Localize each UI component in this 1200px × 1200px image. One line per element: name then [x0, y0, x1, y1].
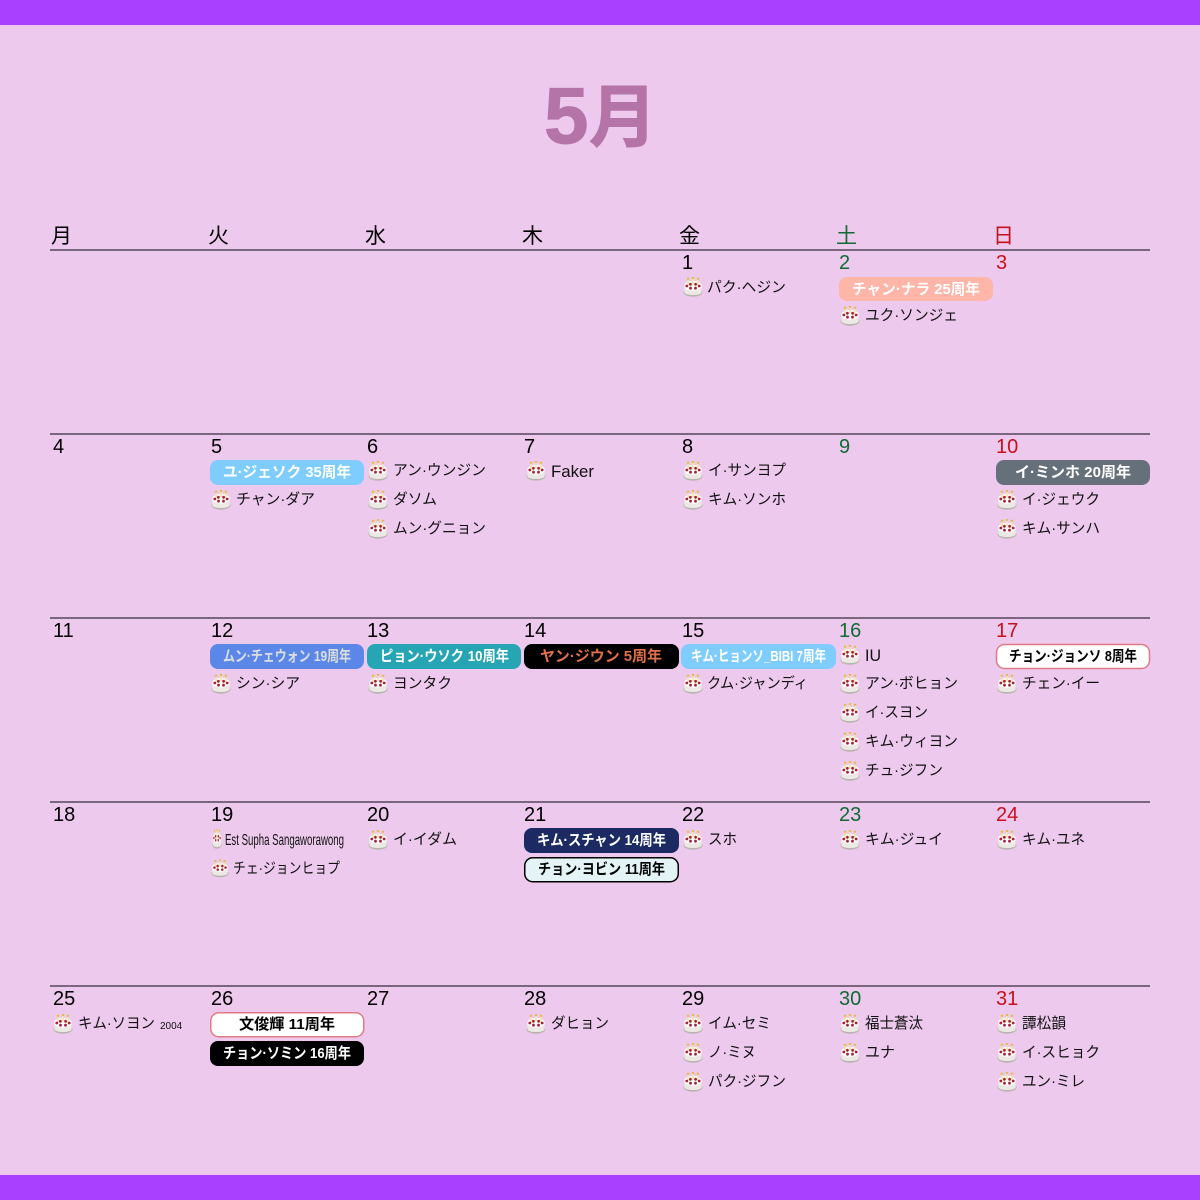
weekday header: 木 [522, 225, 543, 248]
week 3: 11 [53, 620, 74, 642]
birthday: チャン·ダア: チャン·ダア [236, 491, 315, 508]
bottom band [0, 1175, 1200, 1200]
birthday: 譚松韻 [998, 1014, 1066, 1034]
week 4: 20 [367, 804, 389, 826]
birthday: パク·ジフン: パク·ジフン [708, 1073, 786, 1090]
birthday: アン·ウンジン [368, 461, 486, 481]
weekday header [51, 225, 1014, 248]
week 4: 19 [211, 804, 233, 826]
birthday: イ·イダム [368, 830, 457, 850]
week 2 [53, 436, 1150, 539]
birthday: 譚松韻: 譚松韻 [1022, 1015, 1066, 1032]
birthday: キム·ユネ [998, 830, 1085, 850]
anniversary pill: キム·ヒョンソ_BIBI [681, 644, 836, 669]
week 2: 6 [367, 436, 378, 458]
birthday: ダヒョン [526, 1014, 609, 1034]
anniversary pill: チョン·ソミン: チョン·ソミン 16周年 [223, 1044, 351, 1062]
birthday: イ·イダム: イ·イダム [393, 831, 457, 848]
anniversary pill: チョン·ジョンソ [996, 644, 1150, 668]
week 5: 31 [996, 988, 1018, 1010]
week 2: 4 [53, 436, 64, 458]
week 3: 15 [682, 620, 704, 642]
birthday: ムン·グニョン: ムン·グニョン [393, 520, 486, 537]
anniversary pill: イ·ミンホ: イ·ミンホ 20周年 [1015, 463, 1131, 481]
anniversary pill: チャン·ナラ: チャン·ナラ 25周年 [852, 280, 980, 298]
top band [0, 0, 1200, 25]
week 4: 24 [996, 804, 1018, 826]
birthday: ダソム [368, 490, 437, 510]
week 1 [682, 252, 1007, 326]
anniversary pill: チャン·ナラ [839, 277, 993, 301]
birthday: キム·ユネ: キム·ユネ [1022, 831, 1085, 848]
weekday header: 水 [365, 225, 386, 248]
birthday: キム·ソヨン 2004: キム·ソヨン [78, 1015, 155, 1032]
week 3 [53, 620, 1150, 781]
birthday: イ·ジェウク [998, 490, 1100, 510]
birthday: キム·ソンホ: キム·ソンホ [708, 491, 786, 508]
anniversary pill: イ·ミンホ [996, 460, 1150, 485]
birthday: キム·ジュイ [840, 830, 943, 850]
birthday: クム·ジャンディ [684, 674, 808, 694]
birthday: アン·ボヒョン: アン·ボヒョン [865, 675, 958, 692]
week 4: 23 [839, 804, 861, 826]
anniversary pill: チョン·ソミン [210, 1041, 364, 1066]
birthday: クム·ジャンディ: クム·ジャンディ [707, 674, 808, 692]
week 4: 21 [524, 804, 546, 826]
birthday: ユナ [840, 1043, 895, 1063]
birthday: イ·スヨン [840, 703, 928, 723]
birthday: キム·ジュイ: キム·ジュイ [865, 831, 943, 848]
week 3: 12 [211, 620, 233, 642]
birthday: スホ [684, 830, 737, 850]
birthday: アン·ボヒョン [840, 674, 958, 694]
birthday: Faker: Faker [551, 462, 594, 481]
week 5: 28 [524, 988, 546, 1010]
birthday: Est Supha Sangaworawong: Est Supha Sangaworawong [225, 832, 344, 849]
week 1: 2 [839, 252, 850, 274]
birthday: ヨンタク: ヨンタク [393, 675, 452, 692]
title: 月 [589, 80, 657, 156]
weekday header: 月 [51, 225, 72, 248]
week 5 [53, 988, 1100, 1092]
birthday: IU: IU [865, 646, 881, 665]
birthday: アン·ウンジン: アン·ウンジン [393, 462, 486, 479]
weekday header: 土 [836, 225, 857, 248]
birthday: 福士蒼汰 [840, 1014, 923, 1034]
birthday: ユク·ソンジェ: ユク·ソンジェ [865, 307, 958, 324]
anniversary pill: キム·スチャン [524, 828, 679, 853]
weekday header: 金 [679, 225, 700, 248]
birthday: シン·シア [212, 674, 300, 694]
birthday: ヨンタク [368, 674, 452, 694]
birthday: キム·ウィヨン [840, 732, 958, 752]
birthday: チェン·イー: チェン·イー [1022, 675, 1100, 692]
anniversary pill: 文俊輝: 文俊輝 11周年 [239, 1015, 335, 1033]
birthday: チャン·ダア [212, 490, 315, 510]
week 3: 16 [839, 620, 861, 642]
birthday: スホ: スホ [708, 831, 737, 848]
week 5: 25 [53, 988, 75, 1010]
birthday: ノ·ミヌ: ノ·ミヌ [708, 1044, 756, 1061]
week 4: 22 [682, 804, 704, 826]
anniversary pill: ヤン·ジウン: ヤン·ジウン 5周年 [540, 647, 662, 665]
weekday header: 火 [208, 225, 229, 248]
birthday: キム·ソンホ [684, 490, 786, 510]
birthday: キム·ソヨン 2004 [54, 1014, 183, 1034]
birthday: キム·ソヨン 2004: 2004 [160, 1021, 183, 1032]
anniversary pill: チョン·ヨビン: チョン·ヨビン 11周年 [538, 860, 665, 878]
birthday: IU [840, 645, 881, 665]
birthday: パク·ヘジン: パク·ヘジン [707, 279, 786, 296]
week 3: 14 [524, 620, 546, 642]
week 1: 1 [682, 252, 693, 274]
week 2: 9 [839, 436, 850, 458]
birthday: Faker [526, 461, 594, 481]
anniversary pill: ムン·チェウォン [210, 644, 364, 669]
week 4: 18 [53, 804, 75, 826]
birthday: イ·スヨン: イ·スヨン [865, 704, 928, 721]
birthday: チェ·ジョンヒョプ [211, 859, 340, 877]
anniversary pill: チョン·ヨビン [525, 858, 678, 882]
week 5: 29 [682, 988, 704, 1010]
birthday: キム·サンハ: キム·サンハ [1022, 520, 1100, 537]
birthday: イ·スヒョク: イ·スヒョク [1022, 1044, 1100, 1061]
birthday: イ·サンヨプ: イ·サンヨプ [708, 462, 786, 479]
birthday: ユン·ミレ [998, 1072, 1085, 1092]
week 2: 5 [211, 436, 222, 458]
birthday: チュ·ジフン [840, 761, 943, 781]
anniversary pill: キム·スチャン: キム·スチャン 14周年 [537, 831, 666, 849]
birthday: Est Supha Sangaworawong [212, 829, 344, 849]
week 5: 30 [839, 988, 861, 1010]
birthday: キム·サンハ [998, 519, 1100, 539]
birthday: ムン·グニョン [368, 519, 486, 539]
birthday: チェン·イー [998, 674, 1100, 694]
anniversary pill: ヤン·ジウン [524, 644, 679, 669]
birthday: イ·ジェウク: イ·ジェウク [1022, 491, 1100, 508]
anniversary pill: チョン·ジョンソ: チョン·ジョンソ 8周年 [1009, 647, 1137, 665]
birthday: チェ·ジョンヒョプ: チェ·ジョンヒョプ [233, 860, 340, 877]
week 1: 3 [996, 252, 1007, 274]
birthday: ユク·ソンジェ [840, 306, 958, 326]
anniversary pill: ユ·ジェソク [210, 460, 364, 485]
weekday header: 日 [993, 225, 1014, 248]
birthday: キム·ウィヨン: キム·ウィヨン [865, 733, 958, 750]
birthday: ユン·ミレ: ユン·ミレ [1022, 1073, 1085, 1090]
week 4 [53, 804, 1085, 882]
anniversary pill: ムン·チェウォン: ムン·チェウォン 19周年 [223, 647, 351, 665]
week 5: 27 [367, 988, 389, 1010]
birthday: 福士蒼汰: 福士蒼汰 [865, 1015, 923, 1032]
birthday: パク·ジフン [684, 1072, 786, 1092]
birthday: イム·セミ: イム·セミ [708, 1015, 771, 1032]
anniversary pill: ピョン·ウソク: ピョン·ウソク 10周年 [380, 647, 509, 665]
anniversary pill: キム·ヒョンソ_BIBI: キム·ヒョンソ_BIBI 7周年 [691, 647, 826, 665]
birthday: ダソム: ダソム [393, 491, 437, 508]
week 3: 13 [367, 620, 389, 642]
birthday: ユナ: ユナ [865, 1044, 895, 1061]
birthday: ダヒョン: ダヒョン [551, 1015, 609, 1032]
birthday: チュ·ジフン: チュ·ジフン [865, 762, 943, 779]
week 2: 8 [682, 436, 693, 458]
birthday: イム·セミ [684, 1014, 771, 1034]
anniversary pill: ピョン·ウソク [367, 644, 521, 669]
week 3: 17 [996, 620, 1018, 642]
birthday: ノ·ミヌ [684, 1043, 756, 1063]
week 2: 7 [524, 436, 535, 458]
birthday: シン·シア: シン·シア [236, 675, 300, 692]
birthday: イ·サンヨプ [684, 461, 786, 481]
anniversary pill: ユ·ジェソク: ユ·ジェソク 35周年 [223, 463, 351, 481]
anniversary pill: 文俊輝 [211, 1013, 364, 1037]
birthday: イ·スヒョク [998, 1043, 1100, 1063]
week 2: 10 [996, 436, 1018, 458]
title: 5 [544, 71, 588, 160]
week 5: 26 [211, 988, 233, 1010]
birthday: パク·ヘジン [684, 277, 786, 297]
